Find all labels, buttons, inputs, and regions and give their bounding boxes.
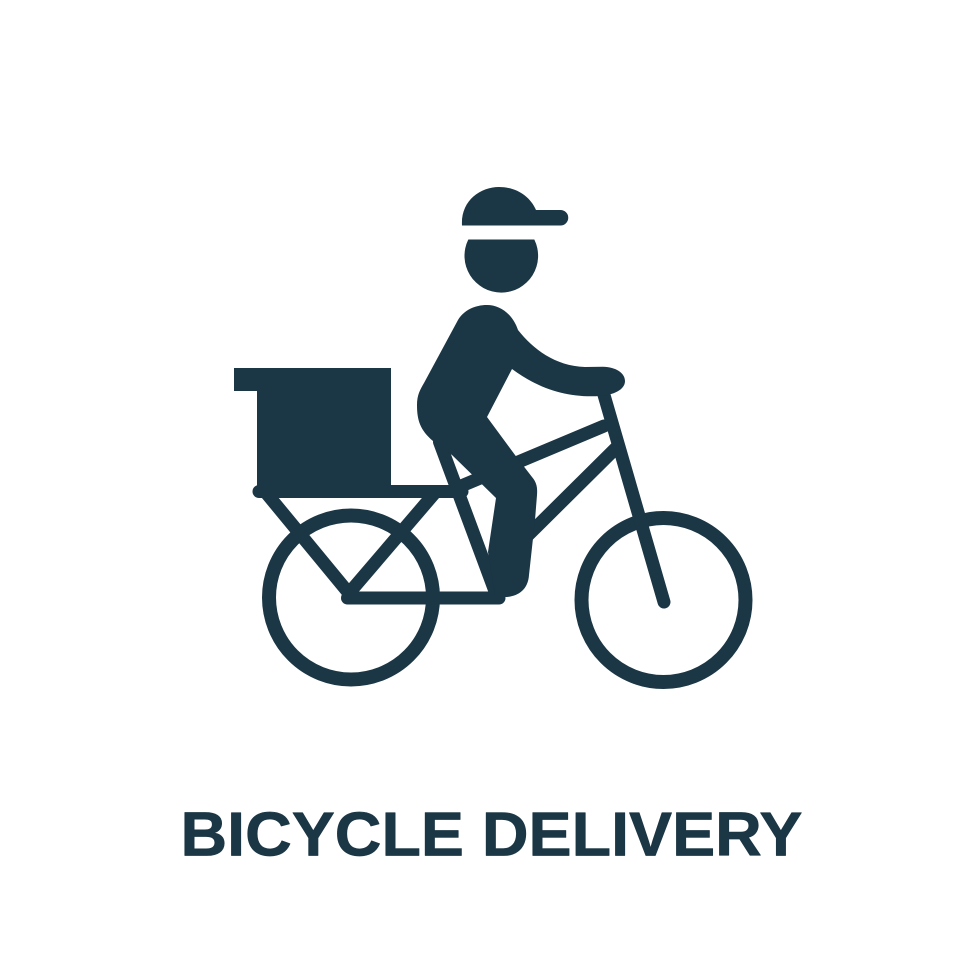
icon: rider body: [417, 305, 625, 597]
icon: front wheel: [582, 518, 746, 682]
icon: rear wheel: [269, 516, 433, 680]
icon: head: [464, 240, 538, 293]
icon: cap: [462, 187, 568, 226]
icon: bicycle delivery courier: [234, 187, 746, 682]
icon: delivery box: [234, 368, 391, 490]
title: BICYCLE DELIVERY: [180, 800, 802, 870]
bicycle frame: [259, 395, 664, 602]
